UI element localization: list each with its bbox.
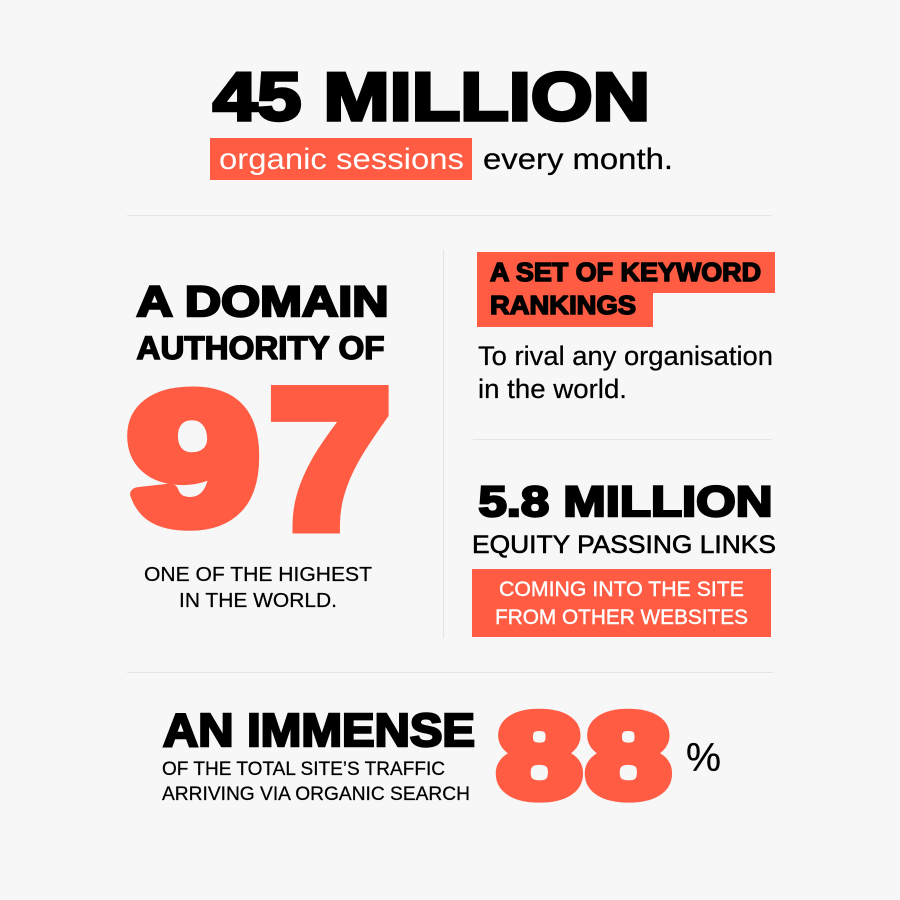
callout: from other websites: COMING INTO THE SITE [499,578,744,601]
big number: 97: 7 [270,351,390,568]
big number: 88: 8 [498,691,581,821]
text: share of traffic: ARRIVING VIA ORGANIC SEARCH [162,784,470,805]
text: to rival any organisation [478,341,773,404]
heading: 5.8 million: 5.8 MILLION [478,478,772,526]
text: to rival any organisation: To rival any organisation [478,341,773,371]
panel: organic traffic share [162,691,721,821]
highlight: organic sessions [210,138,472,180]
text: one of the highest: IN THE WORLD. [179,589,337,612]
text: percent sign: % [686,736,721,780]
heading: authority of: AUTHORITY OF [136,330,384,366]
heading: a domain: A DOMAIN [136,278,388,326]
highlight: keyword rankings heading: A SET OF KEYWORD [490,257,761,287]
text: to rival any organisation: in the world. [478,374,627,404]
highlight: organic sessions: organic sessions [219,143,464,176]
subheading: equity passing links: EQUITY PASSING LINKS [472,531,776,559]
panel: keyword rankings [477,252,775,404]
text: one of the highest [144,563,372,612]
panel: headline [210,59,673,180]
big number: 97 [128,351,390,568]
title: 45 million: 45 MILLION [213,59,650,135]
text: share of traffic [162,759,470,805]
text: every month: every month. [483,143,673,176]
panel: links [472,478,776,637]
big number: 88 [498,691,670,821]
big number: 97: 9 [128,356,259,561]
big number: 88: 8 [587,691,670,821]
text: one of the highest: ONE OF THE HIGHEST [144,563,372,586]
highlight: keyword rankings heading [477,252,775,327]
text: share of traffic: OF THE TOTAL SITE’S TRAFFIC [162,759,445,780]
panel: domain authority [128,278,390,612]
callout: from other websites [472,569,771,637]
callout: from other websites: FROM OTHER WEBSITES [495,606,748,629]
highlight: keyword rankings heading: RANKINGS [490,290,636,320]
heading: an immense: AN IMMENSE [163,704,475,756]
